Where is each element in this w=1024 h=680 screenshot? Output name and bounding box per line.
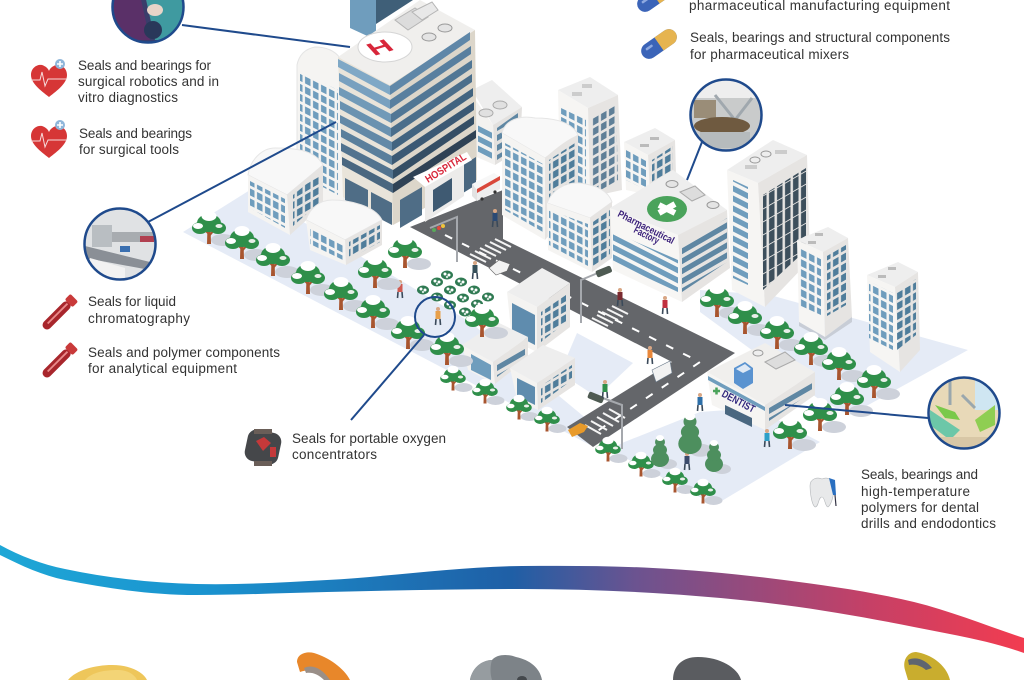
icon: heart tools [31,120,67,158]
gradient wave [0,545,1024,653]
building: arched block left [248,148,323,235]
building: tall tower centre [558,77,622,197]
text: surgical robotics [78,58,219,105]
text: surgical tools: Seals and bearings [79,126,192,141]
helipad: H [361,35,399,60]
helipad [358,32,412,62]
text: surgical robotics: surgical robotics and in [78,74,219,89]
trees: park cones [651,412,731,474]
photo: pharmaceutical plant [690,80,762,150]
text: analytical equipment: Seals and polymer components [88,345,280,360]
text: liquid chromatography [88,294,190,326]
building: tower 3 [797,227,852,340]
photo: surgery [110,0,186,46]
vehicles [472,173,672,437]
ambulance [472,173,500,201]
roof units [395,2,452,41]
text: liquid chromatography: Seals for liquid [88,294,176,309]
photo: dental clinic [928,378,1000,451]
text: analytical equipment [88,345,280,376]
ground: left tree band [183,190,600,445]
connector lines [148,25,928,420]
building: hospital tower [338,0,477,228]
building: small tower centre [624,128,676,195]
text: mixers [690,30,950,62]
text: surgical tools [79,126,192,157]
text: surgical robotics: Seals and bearings for [78,58,212,73]
text: liquid chromatography: chromatography [88,311,190,326]
green cross logo [647,196,687,222]
text: dental: drills and endodontics [861,516,996,531]
text: surgical tools: for surgical tools [79,142,179,157]
hospital sign: HOSPITAL [423,151,469,186]
building: rear tower [350,0,413,40]
product: grey seal [470,655,542,680]
icon: heart robotics [31,59,67,97]
icon: tooth and drill [810,478,836,507]
building: dentist [707,343,815,430]
text: dental [861,467,996,531]
icon: capsule mixers [638,26,680,62]
icon: test tube analytical [40,342,78,380]
building: tower 4 [867,262,920,372]
text: analytical equipment: for analytical equipment [88,361,237,376]
trees: left row [192,211,508,367]
people [398,209,770,470]
product: yellow bearing [68,665,147,680]
ground: courtyard [560,333,633,397]
building: behind hospital [472,80,522,165]
road network [410,190,735,447]
product: yellow cam [904,652,950,680]
factory sign: Pharmaceutical [616,209,676,247]
building: mid block tall [507,268,570,352]
text: oxygen concentrators: Seals for portable oxygen [292,431,446,446]
trees: front row [440,366,722,505]
green plus [713,388,720,394]
ground: park [610,408,820,505]
product: orange spring seal [297,652,350,680]
icon: test tube chromatography [40,294,78,332]
building: hospital rear wing [297,47,345,230]
building: pharmaceutical factory [610,170,730,302]
dentist sign: DENTIST [720,388,757,416]
text: dental: Seals, bearings and [861,467,978,482]
roof blue box [734,362,753,389]
text: oxygen concentrators: concentrators [292,447,377,462]
text: mixers: for pharmaceutical mixers [690,47,849,62]
text: dental: high-temperature [861,484,970,499]
factory sign: Factory [632,225,661,247]
callout circle: portable oxygen user [415,297,455,337]
building: arched block A [502,117,578,240]
building: arched block front [306,200,382,265]
text: mixers: Seals, bearings and structural components [690,30,950,45]
building: mid block 3 [510,345,575,410]
hospital window stripes [338,32,476,193]
icon: wearable oxygen concentrator [243,428,283,466]
product: dark grey seal [673,657,741,680]
photo: laboratory [84,208,156,282]
icon: capsule top [634,0,676,15]
text: surgical robotics: vitro diagnostics [78,90,178,105]
traffic lights [430,217,622,449]
building: tall tower right [727,140,810,307]
text: oxygen concentrators [292,431,446,462]
ground: right tree band [700,290,968,415]
building: mid block 2 [462,322,528,384]
text: dental: polymers for dental [861,500,979,515]
trees: right row [700,284,900,451]
building: arched block B [547,183,612,272]
plaza bushes [417,270,494,316]
hospital ground floor [345,152,476,228]
